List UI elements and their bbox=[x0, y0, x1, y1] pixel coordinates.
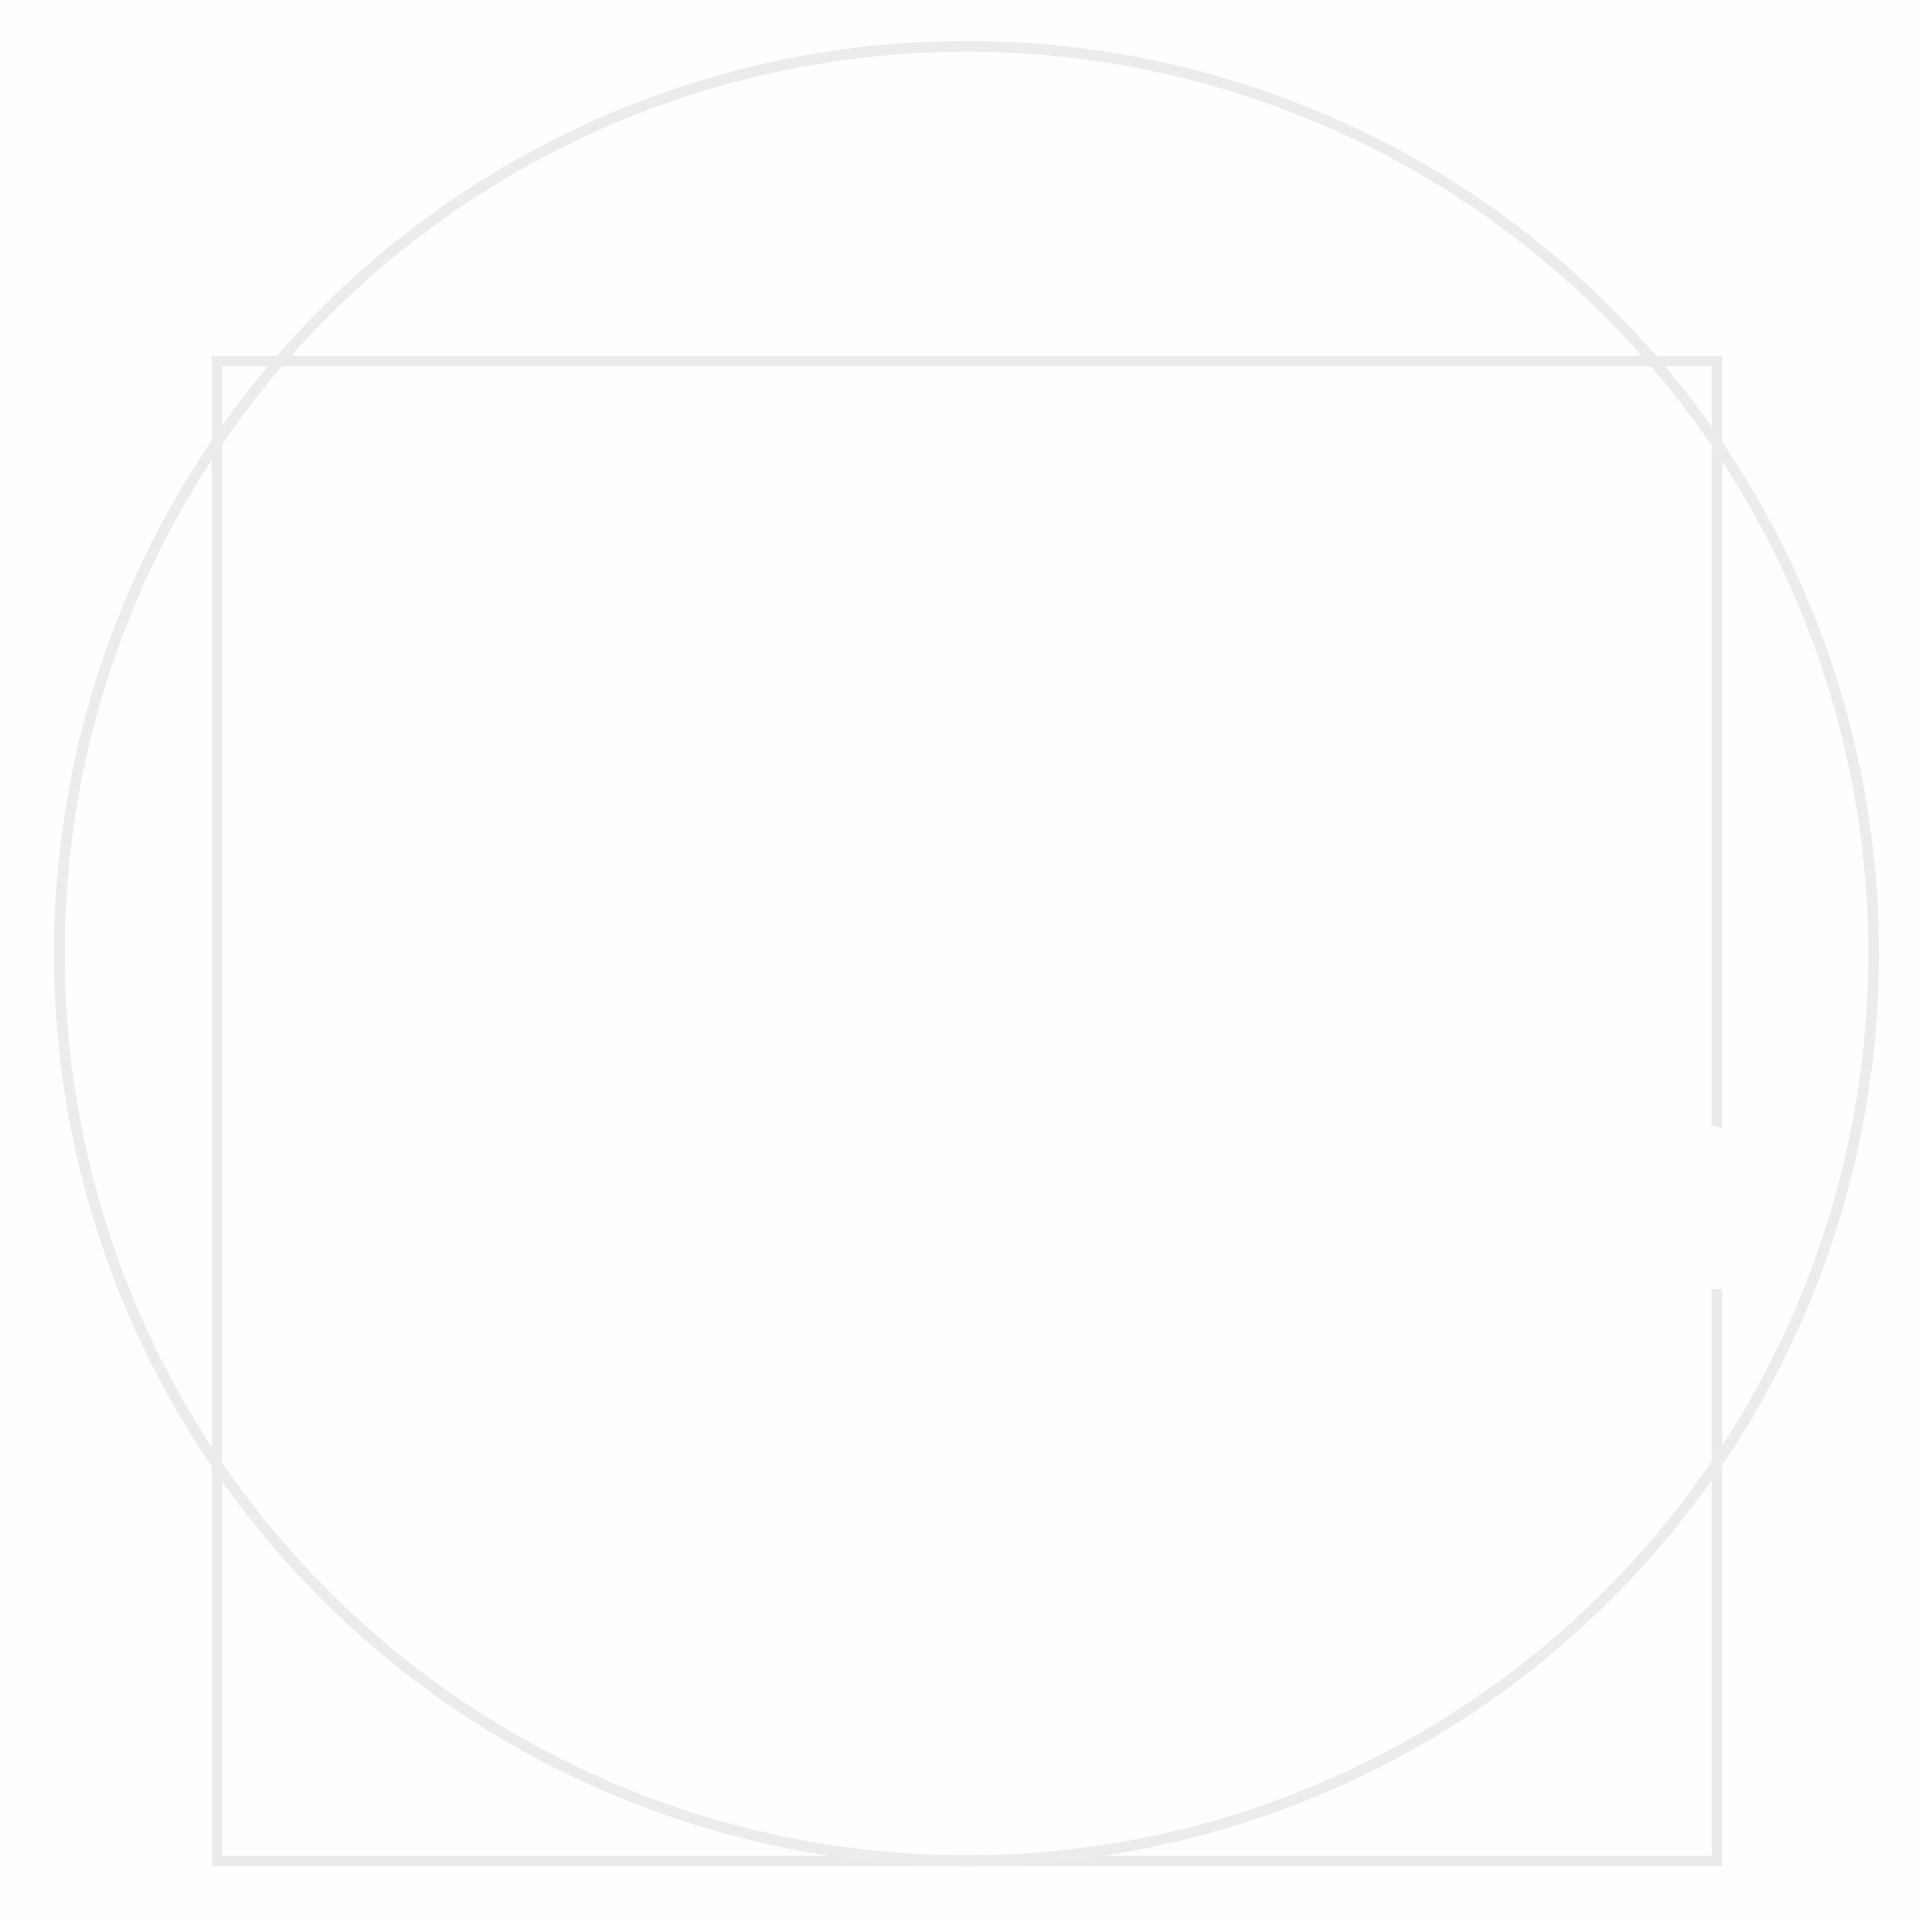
square outline bbox=[217, 361, 1717, 1861]
gap in square right edge bbox=[1710, 1124, 1724, 1289]
